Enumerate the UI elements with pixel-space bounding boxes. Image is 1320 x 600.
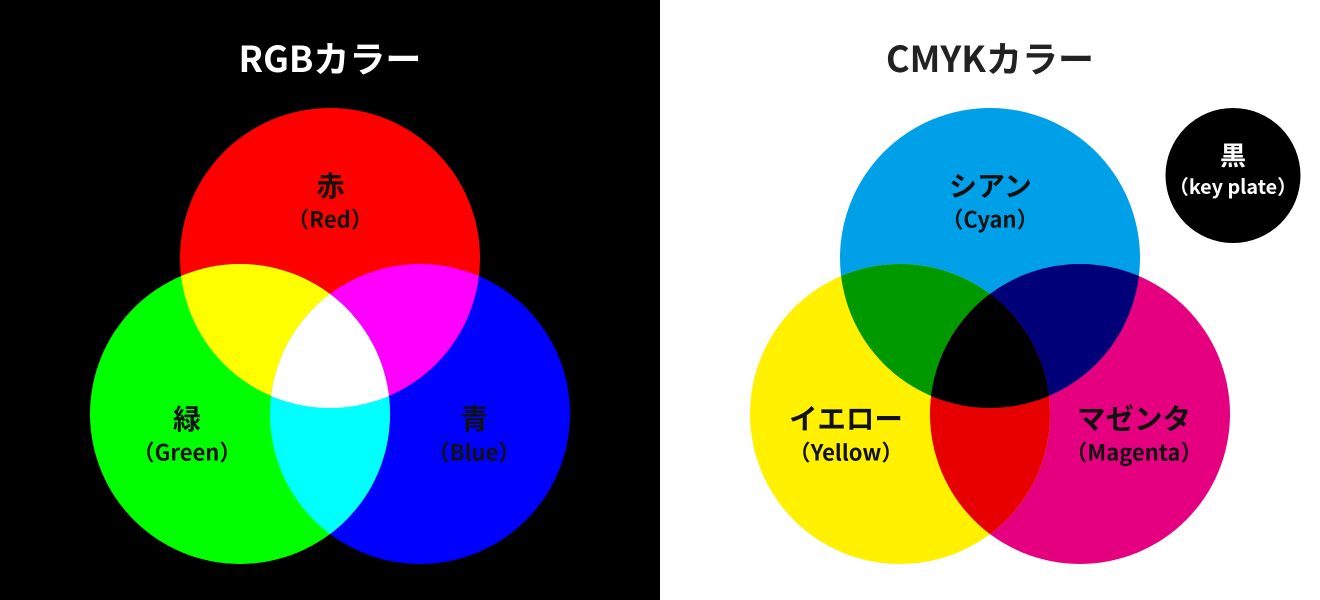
panel: RGB — [0, 0, 660, 600]
label: green: 緑 — [173, 398, 201, 438]
key plate circle: （key plate） — [1169, 171, 1297, 200]
label: Blue: （Blue） — [428, 436, 520, 468]
key plate circle — [1166, 108, 1300, 243]
panel: CMYK — [750, 43, 1300, 564]
label: cyan: シアン — [949, 165, 1032, 205]
label: red: 赤 — [316, 165, 345, 205]
label: Green: （Green） — [133, 436, 241, 468]
label: Magenta: （Magenta） — [1065, 436, 1203, 468]
label: magenta: マゼンタ — [1077, 397, 1191, 438]
label: Yellow: （Yellow） — [789, 436, 903, 468]
heading: CMYK: CMYKカラー — [886, 31, 1094, 83]
label: Red: （Red） — [287, 202, 373, 234]
diagram: CMY circles — [750, 108, 1230, 564]
key plate circle: 黒 — [1220, 136, 1246, 173]
label: Cyan: （Cyan） — [941, 202, 1039, 234]
diagram: RGB circles — [90, 108, 570, 564]
label: blue: 青 — [460, 398, 489, 438]
heading: RGB: RGBカラー — [239, 31, 421, 83]
label: yellow: イエロー — [789, 397, 903, 438]
